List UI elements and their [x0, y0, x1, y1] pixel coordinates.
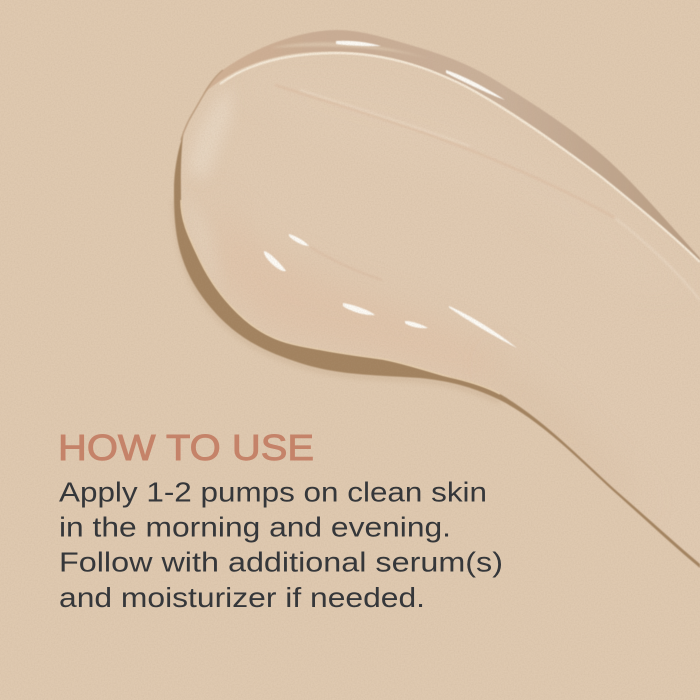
- gel swatch: [174, 30, 700, 568]
- highlight top: [336, 41, 381, 46]
- highlight top right: [446, 70, 505, 100]
- fold line lower: [310, 247, 382, 280]
- instructions text: in the morning and evening.: [59, 512, 451, 542]
- highlight left: [264, 251, 286, 271]
- lower dark rim: [174, 135, 700, 568]
- top band light inner reflection: [270, 42, 440, 62]
- swatch tones: [192, 100, 230, 173]
- left thin edge: [181, 70, 223, 140]
- heading: HOW TO USE: [58, 427, 314, 468]
- faint right arc: [615, 218, 700, 300]
- instructions text: and moisturizer if needed.: [59, 582, 425, 613]
- specular highlights: [264, 41, 517, 348]
- infographic canvas: [59, 30, 700, 608]
- instructions text: Follow with additional serum(s): [59, 546, 503, 578]
- lower rim highlight: [181, 200, 500, 394]
- swatch body: [174, 30, 700, 568]
- highlight small centre: [289, 234, 309, 246]
- highlight small: [405, 321, 428, 328]
- highlight mid: [343, 303, 375, 315]
- top glass band: [203, 30, 700, 262]
- fold line upper: [275, 85, 615, 218]
- lower rim soft shadow: [175, 200, 500, 402]
- instructions text: [59, 476, 503, 613]
- instructions text: Apply 1-2 pumps on clean skin: [59, 476, 487, 508]
- top band inner highlight: [220, 53, 700, 262]
- fold line pale: [300, 90, 470, 146]
- highlight long: [449, 306, 517, 348]
